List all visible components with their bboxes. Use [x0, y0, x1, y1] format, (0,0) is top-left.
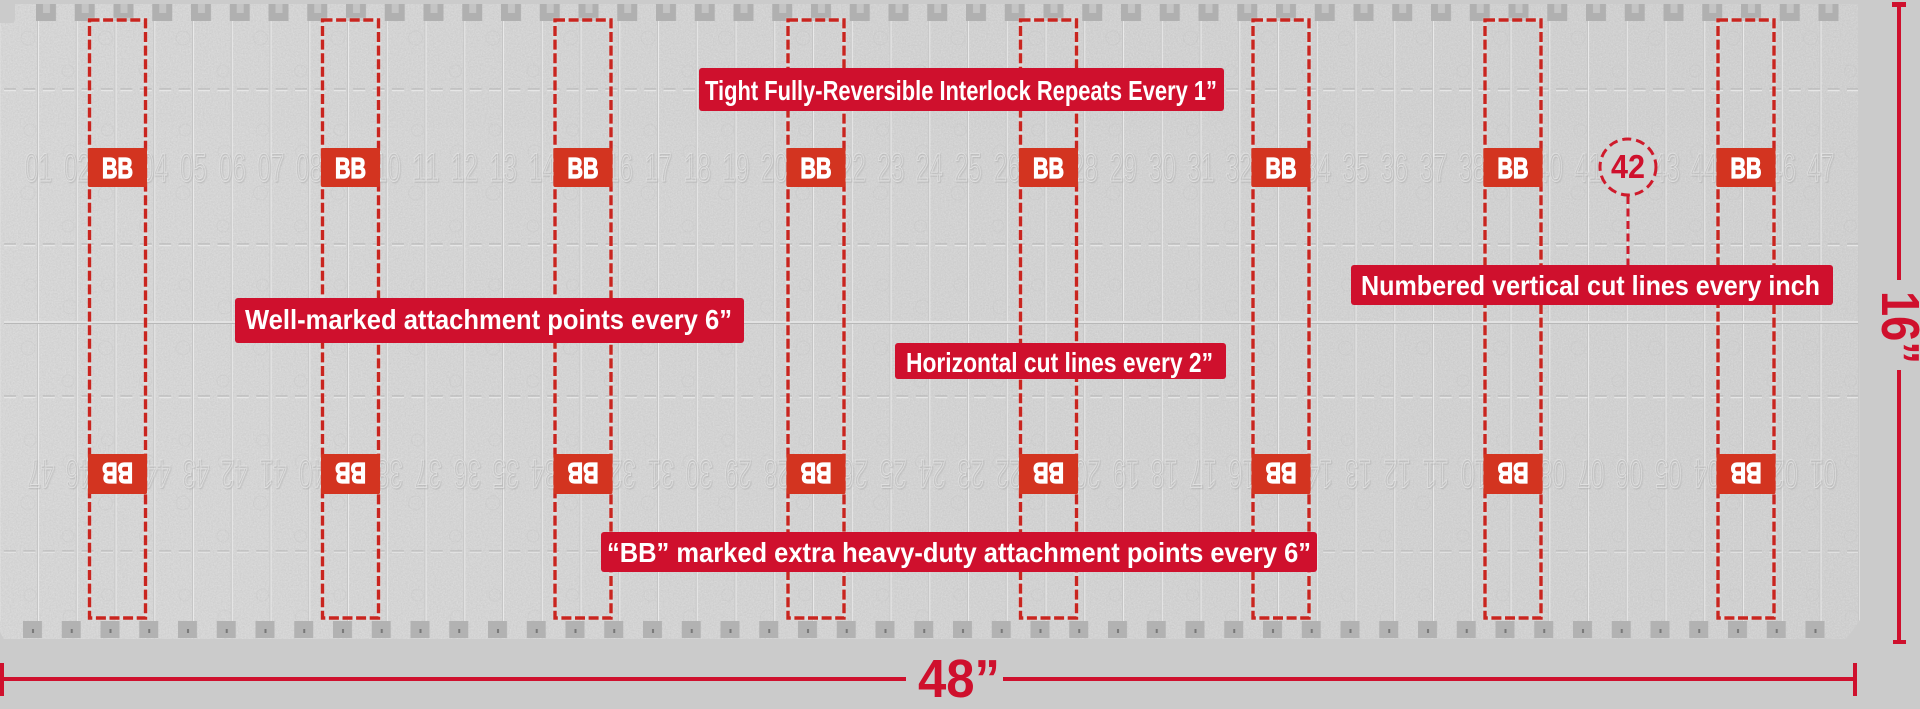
numbered cut marks bottom row, upside down: 05 [1655, 451, 1681, 495]
numbered cut marks top row: 02 [64, 146, 90, 190]
numbered cut marks bottom row, upside down: 07 [1577, 451, 1604, 495]
label: numbered vertical cut lines: Numbered vertical cut lines every inch [1361, 270, 1820, 301]
numbered cut marks bottom row, upside down: 11 [1422, 451, 1449, 495]
numbered cut marks bottom row, upside down: 08 [1539, 451, 1565, 495]
numbered cut marks bottom row, upside down: 25 [880, 451, 906, 495]
numbered cut marks bottom row, upside down: 26 [841, 451, 867, 495]
attachment column 4: BB [800, 153, 832, 185]
numbered cut marks bottom row, upside down: 20 [1074, 451, 1100, 495]
numbered cut marks top row: 16 [606, 146, 632, 190]
numbered cut marks top row: 07 [257, 146, 284, 190]
attachment column 4: BB [800, 456, 832, 488]
numbered cut marks top row: 05 [180, 146, 206, 190]
callout marker: number 42 with leader line: 42 [1611, 148, 1645, 185]
width dimension: 48 inches [0, 649, 1857, 709]
numbered cut marks top row: 31 [1187, 146, 1214, 190]
numbered cut marks top row: 41 [1574, 146, 1602, 190]
numbered cut marks top row: 44 [1690, 146, 1718, 190]
height dimension: 16 inches [1870, 2, 1920, 644]
attachment column 6 [1252, 20, 1310, 618]
attachment column 3 [554, 20, 612, 618]
numbered cut marks top row: 13 [490, 146, 516, 190]
numbered cut marks bottom row, upside down: 32 [609, 451, 635, 495]
numbered cut marks bottom row, upside down: 13 [1345, 451, 1371, 495]
attachment column 6: BB [1266, 456, 1296, 488]
numbered cut marks top row: 43 [1652, 146, 1680, 190]
label: attachment points: Well-marked attachment points every 6” [245, 304, 732, 335]
attachment column 6: BB [1266, 153, 1296, 185]
attachment column 7: BB [1498, 153, 1528, 185]
attachment column 2: BB [335, 153, 366, 185]
attachment column 1 [88, 20, 147, 618]
numbered cut marks bottom row, upside down: 23 [957, 451, 984, 495]
attachment column 1: BB [102, 456, 133, 488]
numbered cut marks top row: 46 [1768, 146, 1796, 190]
attachment column 5: BB [1033, 456, 1064, 488]
numbered cut marks bottom row, upside down: 10 [1461, 451, 1487, 495]
numbered cut marks top row: 35 [1342, 146, 1369, 190]
numbered cut marks top row: 38 [1458, 146, 1486, 190]
numbered cut marks bottom row, upside down: 43 [182, 451, 209, 495]
numbered cut marks bottom row, upside down: 24 [919, 451, 945, 495]
numbered cut marks top row: 04 [140, 146, 168, 190]
numbered cut marks top row: 22 [838, 146, 866, 190]
label: interlock: Tight Fully-Reversible Interlock Repeats Every 1” [705, 75, 1217, 106]
numbered cut marks top row: 14 [528, 146, 556, 190]
width dimension: 48 inches: 48” [918, 649, 1000, 709]
numbered cut marks bottom row, upside down: 41 [260, 451, 286, 495]
label: interlock [699, 68, 1224, 111]
numbered cut marks top row: 11 [412, 146, 439, 190]
numbered cut marks bottom row, upside down: 12 [1384, 451, 1410, 495]
numbered cut marks bottom row, upside down: 22 [996, 451, 1022, 495]
numbered cut marks top row: 40 [1536, 146, 1562, 190]
numbered cut marks top row: 32 [1226, 146, 1252, 190]
numbered cut marks top row: 25 [954, 146, 982, 190]
numbered cut marks bottom row, upside down: 40 [299, 451, 325, 495]
attachment column 3: BB [568, 456, 598, 488]
numbered cut marks top row: 28 [1070, 146, 1098, 190]
label: BB heavy-duty points: “BB” marked extra heavy-duty attachment points every 6” [607, 537, 1311, 568]
numbered cut marks bottom row, upside down: 18 [1151, 451, 1177, 495]
attachment column 4 [786, 20, 846, 618]
callout marker: number 42 with leader line [1600, 139, 1656, 268]
numbered cut marks bottom row, upside down: 36 [454, 451, 480, 495]
numbered cut marks bottom row, upside down [27, 451, 1836, 495]
attachment column 2 [321, 20, 380, 618]
label: attachment points [235, 298, 744, 343]
numbered cut marks top row: 37 [1420, 146, 1446, 190]
numbered cut marks top row: 34 [1304, 146, 1330, 190]
attachment column 7: BB [1498, 456, 1528, 488]
numbered cut marks top row [24, 146, 1834, 190]
numbered cut marks top row: 24 [916, 146, 942, 190]
attachment column 8: BB [1730, 456, 1762, 488]
numbered cut marks bottom row, upside down: 31 [647, 451, 674, 495]
interlock tabs bottom edge [23, 621, 1825, 639]
numbered cut marks bottom row, upside down: 38 [376, 451, 402, 495]
attachment column 3: BB [568, 153, 598, 185]
numbered cut marks top row: 01 [24, 146, 52, 190]
label: horizontal cut lines: Horizontal cut lines every 2” [906, 347, 1213, 378]
numbered cut marks top row: 47 [1807, 146, 1834, 190]
numbered cut marks bottom row, upside down: 42 [221, 451, 247, 495]
numbered cut marks top row: 08 [296, 146, 322, 190]
numbered cut marks bottom row, upside down: 28 [764, 451, 790, 495]
attachment column 8 [1716, 20, 1776, 618]
attachment column 2: BB [335, 456, 366, 488]
attachment column 1: BB [102, 153, 133, 185]
numbered cut marks bottom row, upside down: 14 [1306, 451, 1332, 495]
numbered cut marks bottom row, upside down: 30 [686, 451, 712, 495]
numbered cut marks top row: 26 [994, 146, 1020, 190]
numbered cut marks bottom row, upside down: 02 [1771, 451, 1797, 495]
interlock tabs top edge [36, 4, 1841, 22]
numbered cut marks top row: 29 [1110, 146, 1136, 190]
numbered cut marks bottom row, upside down: 04 [1694, 451, 1720, 495]
numbered cut marks bottom row, upside down: 34 [531, 451, 557, 495]
numbered cut marks top row: 18 [684, 146, 710, 190]
horizontal cut lines [4, 89, 1858, 552]
attachment column 8: BB [1730, 153, 1762, 185]
numbered cut marks top row: 10 [374, 146, 400, 190]
numbered cut marks top row: 12 [450, 146, 478, 190]
numbered cut marks bottom row, upside down: 37 [415, 451, 441, 495]
numbered cut marks top row: 23 [877, 146, 904, 190]
numbered cut marks bottom row, upside down: 35 [492, 451, 519, 495]
numbered cut marks bottom row, upside down: 29 [725, 451, 751, 495]
numbered cut marks bottom row, upside down: 06 [1616, 451, 1642, 495]
attachment column 5: BB [1033, 153, 1064, 185]
numbered cut marks bottom row, upside down: 44 [144, 451, 170, 495]
attachment column 7 [1484, 20, 1542, 618]
numbered cut marks top row: 19 [722, 146, 749, 190]
numbered cut marks bottom row, upside down: 19 [1112, 451, 1139, 495]
numbered cut marks top row: 36 [1380, 146, 1408, 190]
numbered cut marks top row: 30 [1148, 146, 1176, 190]
numbered cut marks top row: 06 [218, 146, 246, 190]
numbered cut marks bottom row, upside down: 01 [1810, 451, 1836, 495]
numbered cut marks bottom row, upside down: 17 [1190, 451, 1216, 495]
numbered cut marks top row: 17 [644, 146, 672, 190]
numbered cut marks top row: 20 [760, 146, 788, 190]
numbered cut marks bottom row, upside down: 46 [66, 451, 92, 495]
numbered cut marks bottom row, upside down: 16 [1229, 451, 1255, 495]
attachment column 5 [1019, 20, 1078, 618]
numbered cut marks bottom row, upside down: 47 [27, 451, 54, 495]
